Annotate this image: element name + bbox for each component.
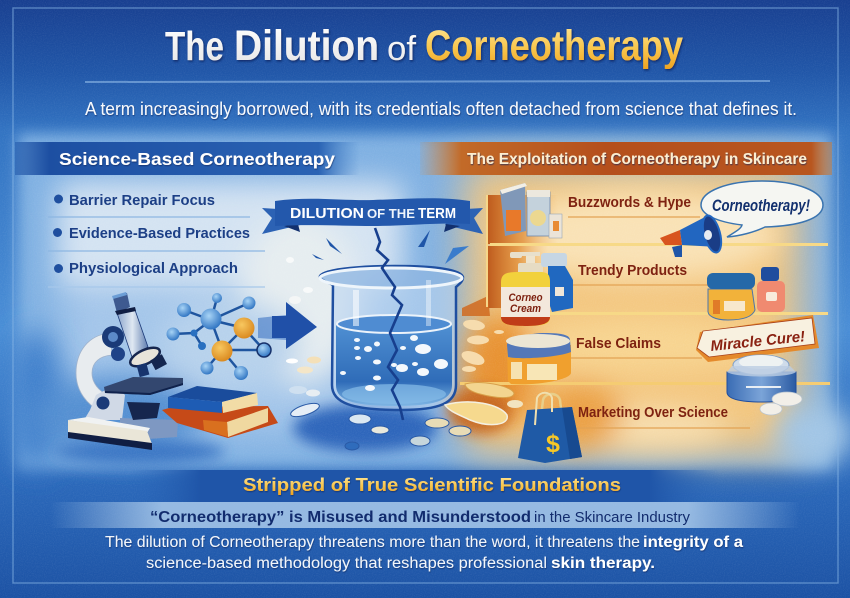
title: Dilution bbox=[234, 22, 379, 70]
panel: exploitation of corneotherapy bbox=[420, 142, 832, 428]
crack line bbox=[375, 228, 403, 420]
band: misused and misunderstood bbox=[50, 502, 800, 528]
left heading: Science-Based Corneotherapy bbox=[59, 149, 335, 169]
list item: barrier repair focus: Barrier Repair Focus bbox=[69, 192, 215, 209]
list item: evidence-based practices bbox=[48, 225, 265, 251]
icon: corneo cream pump bottle: Corneo bbox=[508, 292, 543, 304]
label: trendy products: Trendy Products bbox=[578, 262, 687, 279]
shelving bbox=[460, 195, 830, 428]
icon: corneo cream pump bottle: Cream bbox=[510, 303, 541, 315]
central backdrop: blue science side and orange marketing side bbox=[7, 134, 850, 470]
list item: physiological approach: Physiological Approach bbox=[69, 260, 238, 277]
title: The bbox=[165, 23, 224, 69]
callout: miracle cure: Miracle Cure! bbox=[710, 328, 806, 355]
title bbox=[165, 22, 683, 70]
closing statement: science-based methodology that reshapes professional bbox=[146, 555, 547, 572]
list item: physiological approach bbox=[48, 260, 265, 287]
impact marks bbox=[312, 230, 469, 264]
arrow into beaker bbox=[258, 302, 317, 349]
callout: corneotherapy speech bubble bbox=[701, 181, 823, 237]
title: of bbox=[387, 30, 417, 68]
banner: stripped of true scientific foundations bbox=[130, 470, 720, 502]
band: misused and misunderstood: “Corneotherapy” is Misused and Misunderstood bbox=[150, 509, 531, 526]
list item: evidence-based practices: Evidence-Based Practices bbox=[69, 225, 250, 242]
subtitle: A term increasingly borrowed, with its credentials often detached from science that defines it. bbox=[85, 99, 797, 119]
left heading band bbox=[15, 142, 360, 175]
icon: shopping bag with dollar sign: $ bbox=[546, 430, 560, 458]
icon: microscope bbox=[68, 292, 183, 450]
icon: tubes on top shelf bbox=[500, 183, 562, 238]
icon: cracked beaker bbox=[320, 266, 463, 410]
banner: dilution of the term: DILUTION bbox=[290, 205, 364, 222]
icon: corneo cream pump bottle bbox=[501, 252, 573, 326]
closing statement: integrity of a bbox=[643, 534, 743, 551]
label: marketing over science: Marketing Over Science bbox=[578, 405, 728, 421]
spilled drops around beaker bbox=[286, 257, 471, 450]
banner: stripped of true scientific foundations: Stripped of True Scientific Foundations bbox=[243, 475, 621, 495]
title: Corneotherapy bbox=[425, 22, 683, 70]
banner: dilution of the term: TERM bbox=[418, 205, 456, 222]
label: false claims: False Claims bbox=[576, 335, 661, 352]
label: buzzwords & hype: Buzzwords & Hype bbox=[568, 195, 691, 211]
panel: science-based corneotherapy bbox=[15, 142, 360, 287]
closing statement bbox=[105, 534, 743, 572]
band: misused and misunderstood: in the Skincare Industry bbox=[534, 510, 691, 526]
banner: dilution of the term bbox=[262, 198, 483, 234]
icon: blue cream jar bbox=[727, 355, 802, 415]
icon: molecule bbox=[166, 293, 271, 380]
right heading band bbox=[420, 142, 832, 175]
icon: books bbox=[162, 386, 278, 438]
callout: corneotherapy speech bubble: Corneotherapy! bbox=[712, 196, 810, 215]
right heading: The Exploitation of Corneotherapy in Skincare bbox=[467, 151, 807, 168]
closing statement: The dilution of Corneotherapy threatens more than the word, it threatens the bbox=[105, 534, 640, 551]
icon: shopping bag with dollar sign bbox=[518, 393, 582, 463]
closing statement: skin therapy. bbox=[551, 555, 655, 572]
icon: false claims jar bbox=[506, 333, 571, 384]
icon: orange jar and pink bottle bbox=[707, 267, 785, 320]
callout: miracle cure bbox=[696, 315, 819, 362]
icon: megaphone bbox=[660, 214, 725, 257]
list item: barrier repair focus bbox=[48, 192, 250, 217]
banner: dilution of the term: OF THE bbox=[367, 207, 415, 221]
spilled orange drops bbox=[445, 319, 523, 425]
